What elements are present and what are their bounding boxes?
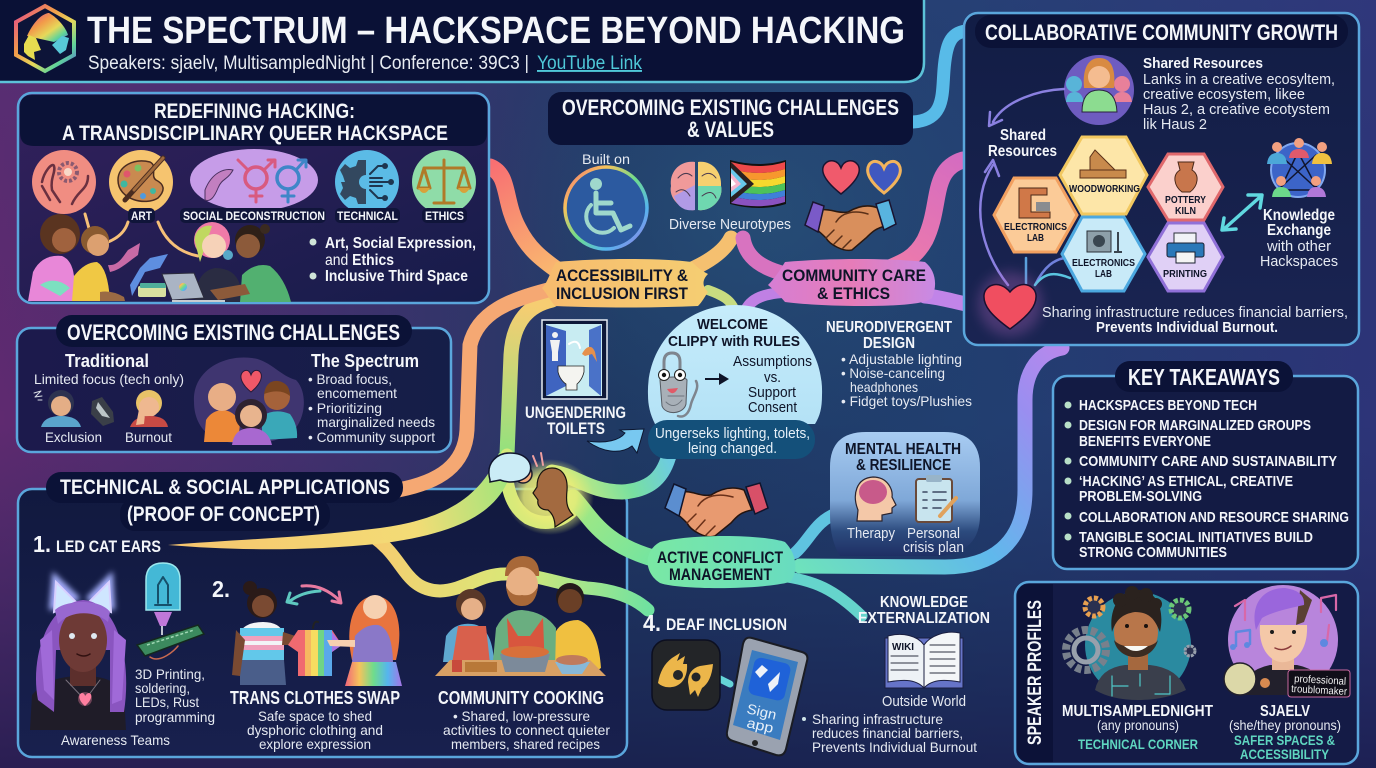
node: community care and ethics: & ETHICS <box>817 284 890 303</box>
text: knowledge exchange: Exchange <box>1267 222 1331 239</box>
text: bullets: Art, Social Expression, <box>325 235 476 252</box>
hexagon: pottery kiln <box>1148 154 1223 220</box>
text: shared resources description: lik Haus 2 <box>1143 117 1207 133</box>
heading: KEY TAKEAWAYS <box>1128 364 1280 390</box>
text: multisamplednight: MULTISAMPLEDNIGHT <box>1062 703 1213 720</box>
text: trans clothes swap <box>230 688 400 752</box>
text: neurodivergent design: • Fidget toys/Plushies <box>841 393 972 409</box>
label: ungendering toilets <box>525 403 626 438</box>
text: sharing infrastructure statement: Sharing infrastructure reduces financial barriers, <box>1042 304 1348 321</box>
text: community cooking: • Shared, low-pressure <box>453 708 590 724</box>
icon: ethics scales <box>412 150 476 214</box>
icon: led and strip <box>137 563 204 659</box>
subtitle: speakers and conference: Speakers: sjaelv, MultisampledNight | Conference: 39C3 | <box>88 53 529 74</box>
panel: mental health and resilience <box>830 432 980 556</box>
illustration: two people at left <box>28 214 168 301</box>
hexagon: electronics lab blue: ELECTRONICS <box>1072 258 1135 269</box>
avatar: sjaelv <box>1224 585 1350 698</box>
label: social deconstruction: SOCIAL DECONSTRUCTION <box>183 209 325 223</box>
icon: hackspaces network <box>1267 138 1332 197</box>
label: shared resources: Shared <box>1000 127 1046 144</box>
illustration: person with led cat ears <box>30 578 126 730</box>
arrow: knowledge exchange <box>1222 195 1262 230</box>
list: takeaways: STRONG COMMUNITIES <box>1079 544 1227 561</box>
icon: ungendered toilet door <box>542 320 607 399</box>
label: shared resources <box>988 127 1057 160</box>
heading pill: OVERCOMING EXISTING CHALLENGES <box>67 320 400 345</box>
icon: burnout person <box>125 390 172 445</box>
badge: professional troublemaker tag: troublomaker <box>1291 683 1348 698</box>
bubble: welcome clippy with rules <box>648 305 822 459</box>
icon: sign language phone app: app <box>745 714 775 736</box>
heading: overcoming existing challenges and values <box>548 92 913 145</box>
hexagon: printing <box>1148 223 1223 291</box>
text: assumptions versus support consent: Support <box>748 385 796 401</box>
icon: signing hands <box>652 640 720 710</box>
text: trans clothes swap: explore expression <box>259 736 371 752</box>
text: bullets <box>310 235 476 285</box>
header bar <box>0 0 924 82</box>
text: neurodivergent design: • Noise-canceling <box>841 365 945 381</box>
heading: 4 deaf inclusion <box>643 610 787 636</box>
node: community care and ethics <box>768 259 935 306</box>
node: active conflict management <box>648 536 795 588</box>
label: outside world: Outside World <box>882 694 966 710</box>
text: shared resources description <box>1143 55 1335 133</box>
icon: exclusion person: Exclusion <box>45 430 102 445</box>
text: neurodivergent design: • Adjustable lighting <box>841 351 962 367</box>
list: takeaways: COMMUNITY CARE AND SUSTAINABILITY <box>1079 453 1337 470</box>
text: assumptions versus support consent: Assumptions <box>733 354 812 370</box>
text: multisamplednight <box>1062 703 1213 752</box>
heading <box>62 100 448 145</box>
heading: MENTAL HEALTH <box>845 441 961 458</box>
list: takeaways: HACKSPACES BEYOND TECH <box>1079 397 1257 414</box>
hexagon: printing: PRINTING <box>1163 268 1207 280</box>
hexagon: woodworking: WOODWORKING <box>1069 184 1140 195</box>
icon: open wiki book: WIKI <box>892 642 914 653</box>
text: the spectrum: • Broad focus, <box>308 371 392 387</box>
text: led skills: LEDs, Rust <box>135 694 199 710</box>
list: takeaways: TANGIBLE SOCIAL INITIATIVES BUILD <box>1079 529 1313 546</box>
panel: technical and social applications <box>18 290 670 757</box>
ribbons crossing the panel <box>168 290 670 610</box>
text: multisamplednight: TECHNICAL CORNER <box>1078 736 1198 752</box>
arrows: heart to shared resources and labs <box>980 160 1070 288</box>
text: shared resources description: Shared Resources <box>1143 55 1263 72</box>
text: neurodivergent design: headphones <box>850 379 918 395</box>
hexagon: electronics lab blue <box>1062 217 1145 291</box>
illustration: two people with laptop <box>162 222 291 302</box>
text: assumptions versus support consent: vs. <box>764 370 781 386</box>
icon: brain head: Therapy <box>847 526 896 542</box>
icon: progress pride flag <box>730 160 786 208</box>
text: sharing infrastructure statement: Prevents Individual Burnout. <box>1096 319 1278 336</box>
icon: burnout person: Burnout <box>125 430 172 445</box>
illustration: community group with heart <box>194 357 304 445</box>
icon: sign language phone app: Sign <box>745 700 778 723</box>
text: knowledge exchange: Knowledge <box>1263 207 1335 224</box>
text: neurodivergent design: NEURODIVERGENT <box>826 319 952 336</box>
text: bullets: Inclusive Third Space <box>325 268 468 285</box>
heading: A TRANSDISCIPLINARY QUEER HACKSPACE <box>62 122 448 145</box>
icon: sign language phone app <box>727 638 807 755</box>
text: trans clothes swap: dysphoric clothing and <box>247 722 383 738</box>
arrow: clippy to text <box>705 373 729 385</box>
text: knowledge externalization: EXTERNALIZATION <box>858 610 990 627</box>
text: shared resources description: creative ecosystem, likee <box>1143 87 1305 103</box>
text: sjaelv <box>1229 703 1341 762</box>
label: 2: 2. <box>212 576 230 602</box>
caption: awareness teams: Awareness Teams <box>61 732 170 748</box>
caption pill <box>648 420 815 459</box>
label: built on: Built on <box>582 151 630 167</box>
heading: CLIPPY with RULES <box>668 333 800 350</box>
text: the spectrum: encomement <box>317 385 397 401</box>
icon: crisis plan clipboard: crisis plan <box>903 540 964 556</box>
text: sharing infrastructure bullet: Sharing infrastructure <box>812 711 943 727</box>
icon: hearts <box>823 161 900 194</box>
list: takeaways: PROBLEM-SOLVING <box>1079 488 1202 505</box>
caption pill: Ungerseks lighting, tolets, <box>655 426 810 442</box>
hexagon: electronics lab orange <box>994 178 1077 252</box>
label: shared resources: Resources <box>988 143 1057 160</box>
text: led skills <box>135 666 215 725</box>
icon: clippy <box>658 353 697 416</box>
icon: wheelchair accessibility <box>565 167 647 249</box>
text: community cooking: activities to connect quieter <box>443 722 610 738</box>
icon: exclusion person <box>34 390 102 445</box>
text: knowledge externalization <box>858 594 990 627</box>
icon: rainbow brain <box>671 162 721 210</box>
arrow: toilets to clippy <box>587 429 644 453</box>
panel: redefining hacking <box>18 93 489 303</box>
hexagon: pottery kiln: POTTERY <box>1165 195 1206 206</box>
icon: community hands and gear <box>32 150 96 214</box>
text: community cooking <box>438 688 610 752</box>
text: shared resources description: Lanks in a creative ecosyltem, <box>1143 72 1335 88</box>
heading: overcoming existing challenges and values: OVERCOMING EXISTING CHALLENGES <box>562 95 899 120</box>
text: traditional <box>34 351 184 387</box>
text: community cooking: COMMUNITY COOKING <box>438 688 604 708</box>
icon: open wiki book <box>885 632 963 688</box>
list: takeaways: ‘HACKING’ AS ETHICAL, CREATIVE <box>1079 473 1293 490</box>
text: led skills: programming <box>135 709 215 725</box>
hexagon: electronics lab orange: LAB <box>1027 233 1044 244</box>
node: community care and ethics: COMMUNITY CARE <box>782 266 926 285</box>
connector ribbons <box>490 31 1062 684</box>
text: sjaelv: ACCESSIBILITY <box>1240 746 1330 762</box>
hexagon: pottery kiln: KILN <box>1175 206 1196 217</box>
label: technical: TECHNICAL <box>337 209 398 223</box>
heading: overcoming existing challenges and values: & VALUES <box>687 117 774 142</box>
node: accessibility and inclusion first: INCLUSION FIRST <box>556 284 689 303</box>
heading: WELCOME <box>697 316 768 333</box>
text: sjaelv: SAFER SPACES & <box>1234 732 1335 748</box>
heading: & RESILIENCE <box>856 457 951 474</box>
text: neurodivergent design: DESIGN <box>863 335 915 352</box>
text: assumptions versus support consent <box>733 354 812 416</box>
list: takeaways <box>1064 397 1349 561</box>
connectors from circles to people <box>85 214 198 256</box>
icon: crisis plan clipboard: Personal <box>907 526 960 542</box>
label: ethics: ETHICS <box>425 209 464 223</box>
panel: speaker profiles <box>1015 582 1358 764</box>
text: the spectrum: The Spectrum <box>311 351 419 371</box>
text: bullets: and Ethics <box>325 252 394 269</box>
icon: crisis plan clipboard <box>903 475 964 556</box>
label: 1 led cat ears: 1. <box>33 531 51 557</box>
text: sharing infrastructure bullet: reduces financial barriers, <box>812 725 963 741</box>
text: traditional: Traditional <box>65 351 149 371</box>
heading pills: (PROOF OF CONCEPT) <box>127 503 320 526</box>
caption pill: leing changed. <box>688 441 777 457</box>
text: the spectrum: • Community support <box>308 429 435 445</box>
heading <box>975 15 1348 48</box>
heading: rotated: SPEAKER PROFILES <box>1025 600 1046 745</box>
title: THE SPECTRUM – HACKSPACE BEYOND HACKING <box>87 10 905 52</box>
icon: brain head <box>847 477 896 542</box>
text: sjaelv: (she/they pronouns) <box>1229 717 1341 733</box>
text: knowledge exchange: Hackspaces <box>1260 253 1338 270</box>
icon: social deconstruction gender symbols <box>190 149 318 211</box>
heading <box>845 441 961 474</box>
icon: broken device <box>91 397 114 426</box>
arrow: people to shared resources <box>989 89 1064 126</box>
node: active conflict management: ACTIVE CONFLICT <box>657 549 783 567</box>
icon: technical gear and circuit <box>335 150 399 214</box>
illustration: trans clothes swap <box>232 581 402 686</box>
text: the spectrum: marginalized needs <box>317 414 435 430</box>
badge: professional troublemaker tag <box>1288 670 1350 698</box>
text: sharing infrastructure statement <box>1042 304 1348 336</box>
avatar: multisamplednight <box>1066 586 1195 700</box>
heading: REDEFINING HACKING: <box>154 100 355 123</box>
hexagon: electronics lab blue: LAB <box>1095 269 1112 280</box>
list: takeaways: DESIGN FOR MARGINALIZED GROUPS <box>1079 417 1311 434</box>
node: accessibility and inclusion first <box>542 259 708 308</box>
text: led skills: 3D Printing, <box>135 666 205 682</box>
label: 1 led cat ears <box>33 531 161 557</box>
label: art: ART <box>131 209 153 223</box>
icon: heart <box>978 272 1042 336</box>
label: ungendering toilets: UNGENDERING <box>525 403 626 422</box>
heading <box>1115 361 1293 392</box>
icon: people circle <box>1064 55 1134 125</box>
panel: key takeaways <box>1053 361 1358 569</box>
hexagon: woodworking <box>1060 137 1147 214</box>
text: the spectrum: • Prioritizing <box>308 400 382 416</box>
icon: rainbow hexagon logo <box>16 6 74 71</box>
list: takeaways: BENEFITS EVERYONE <box>1079 433 1211 450</box>
text: neurodivergent design <box>826 319 972 409</box>
text: sharing infrastructure bullet: Prevents Individual Burnout <box>812 739 977 755</box>
text: the spectrum <box>308 351 435 445</box>
hexagon: electronics lab orange: ELECTRONICS <box>1004 222 1067 233</box>
text: knowledge exchange: with other <box>1266 238 1331 255</box>
text: traditional: Limited focus (tech only) <box>34 371 184 387</box>
text: shared resources description: Haus 2, a creative ecotystem <box>1143 102 1330 118</box>
text: trans clothes swap: Safe space to shed <box>258 708 372 724</box>
icon: art palette <box>109 150 173 214</box>
heading pill <box>56 315 412 347</box>
text: trans clothes swap: TRANS CLOTHES SWAP <box>230 688 400 708</box>
text: led skills: soldering, <box>135 680 190 696</box>
text: knowledge exchange <box>1260 207 1338 270</box>
text: multisamplednight: (any pronouns) <box>1097 717 1179 733</box>
text: community cooking: members, shared recipes <box>451 736 600 752</box>
text: sharing infrastructure bullet <box>802 711 977 755</box>
node: active conflict management: MANAGEMENT <box>669 566 772 584</box>
label: ungendering toilets: TOILETS <box>547 419 605 438</box>
node: accessibility and inclusion first: ACCESSIBILITY & <box>556 266 688 285</box>
heading pills: TECHNICAL & SOCIAL APPLICATIONS <box>60 476 390 499</box>
link: YouTube: YouTube Link <box>537 53 642 74</box>
text: sjaelv: SJAELV <box>1260 703 1310 720</box>
label: 1 led cat ears: LED CAT EARS <box>56 537 161 556</box>
heading: 4 deaf inclusion: 4. <box>643 610 661 636</box>
heading pills <box>46 472 403 531</box>
label: diverse neurotypes: Diverse Neurotypes <box>669 217 791 233</box>
centre: glowing person and speech bubble <box>489 453 594 535</box>
panel: overcoming existing challenges <box>17 315 451 452</box>
panel: collaborative community growth <box>964 13 1359 345</box>
icon: handshake conflict <box>665 483 768 537</box>
text: assumptions versus support consent: Consent <box>748 400 797 416</box>
heading <box>668 316 800 350</box>
heading: 4 deaf inclusion: DEAF INCLUSION <box>666 615 787 634</box>
icon: handshake <box>805 200 896 250</box>
badge: professional troublemaker tag: professional <box>1294 673 1346 688</box>
illustration: community cooking <box>435 556 606 676</box>
text: knowledge externalization: KNOWLEDGE <box>880 594 968 611</box>
